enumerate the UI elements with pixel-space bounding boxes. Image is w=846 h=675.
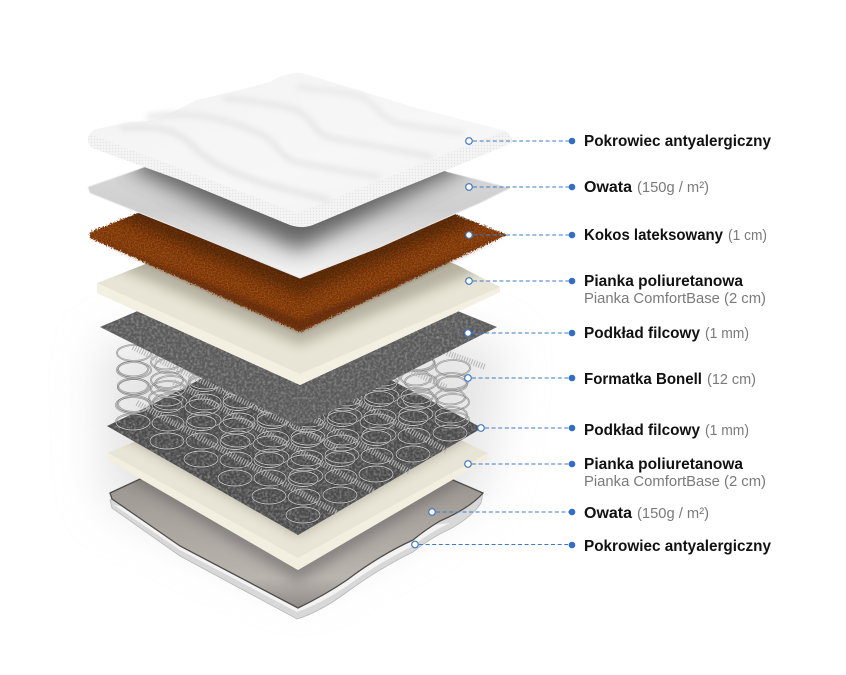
layer: upper felt pad [100,240,497,427]
callouts [412,133,771,555]
label: felt pad lower: (1 mm) [705,422,749,439]
cover quilting waves [120,87,463,200]
anchor dots, filled [569,138,575,548]
label: latex coconut: Kokos lateksowany [584,227,723,244]
label: felt pad: (1 mm) [705,325,749,342]
layer: lower felt pad [107,330,482,535]
layer: bottom cover and wadding [109,478,484,620]
anchor dots, open [412,138,484,548]
label: polyurethane foam: Pianka poliuretanowa [584,273,743,290]
layer: upper foam [97,262,500,385]
label: wadding [584,179,709,196]
label: cover: Pokrowiec antyalergiczny [584,133,771,150]
spring grid [116,280,468,523]
soft ambient shadow [100,310,505,590]
label: wadding lower: (150g / m²) [637,505,709,522]
mattress layers infographic [88,73,771,620]
back springs [116,338,470,428]
label: wadding lower: Owata [584,505,632,522]
label: polyurethane foam lower: Pianka poliuretanowa [584,456,743,473]
layer: top anti-allergy cover [88,73,512,227]
Bonell spring unit [116,280,485,523]
label: Bonell springs: (12 cm) [707,371,756,388]
layer: wadding [88,167,510,278]
label: wadding lower [584,505,709,522]
label: latex coconut: (1 cm) [728,227,767,244]
helical lacing wires [133,341,485,513]
label: felt pad lower: Podkład filcowy [584,422,700,439]
label: polyurethane foam [584,273,766,307]
label: polyurethane foam lower: Pianka ComfortBase (2 cm) [584,473,766,490]
label: cover lower: Pokrowiec antyalergiczny [584,538,771,555]
label: polyurethane foam lower [584,456,766,490]
label: polyurethane foam: Pianka ComfortBase (2 cm) [584,290,766,307]
label: Bonell springs: Formatka Bonell [584,371,702,388]
label: wadding: (150g / m²) [637,179,709,196]
layer: lower foam [108,440,488,570]
label: wadding: Owata [584,179,632,196]
layer: latex coconut [88,212,508,334]
label: felt pad: Podkład filcowy [584,325,700,342]
leader lines [419,141,572,544]
